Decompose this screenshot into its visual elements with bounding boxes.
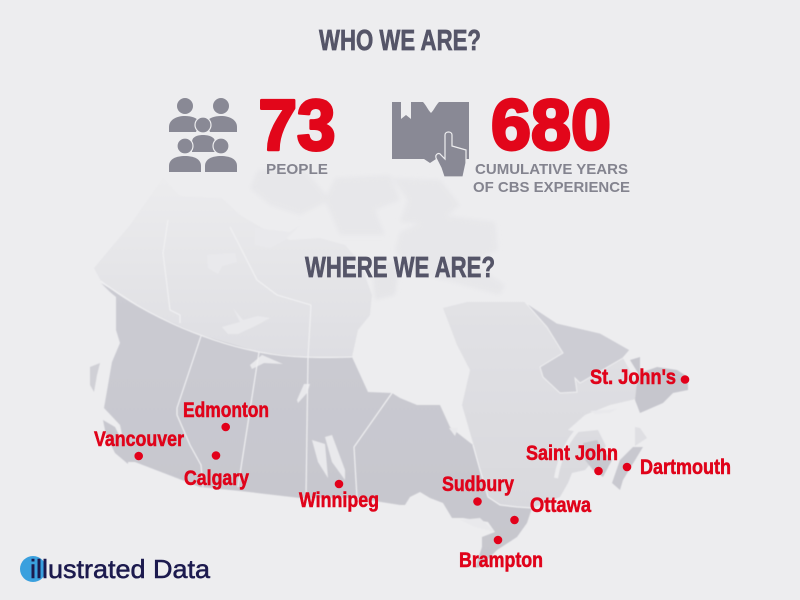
label: cumulative years of CBS experience: OF CBS EXPERIENCE (473, 179, 630, 196)
Nova Scotia (612, 447, 643, 490)
city: Saint John: Saint John (526, 442, 618, 465)
Labrador (525, 302, 630, 393)
city: Ottawa (510, 494, 591, 524)
provincial borders (101, 220, 532, 508)
Cape Breton (635, 427, 647, 446)
number: 680: 680 (491, 86, 611, 166)
title: who we are: WHO WE ARE? (319, 25, 481, 57)
Newfoundland (630, 357, 688, 413)
number: 73: 73 (258, 86, 336, 166)
icon: people (169, 98, 237, 172)
logo: illustrated Data: illustrated Data (30, 554, 211, 584)
Vancouver Island (103, 420, 128, 464)
estuary of the St. Lawrence (556, 406, 636, 478)
Haida Gwaii (90, 363, 100, 392)
lakes (207, 225, 617, 532)
city: Edmonton (183, 399, 269, 431)
city: Brampton: Brampton (459, 549, 543, 572)
label: cumulative years of CBS experience (473, 161, 630, 196)
city: Winnipeg: Winnipeg (299, 489, 379, 512)
New Brunswick (583, 440, 612, 477)
map of Canada (90, 170, 688, 568)
city: Sudbury (442, 473, 514, 506)
city: Dartmouth: Dartmouth (640, 456, 731, 479)
city: Sudbury: Sudbury (442, 473, 514, 496)
city: Brampton (459, 536, 543, 572)
icon: book and hand (392, 102, 469, 177)
title: where we are: WHERE WE ARE? (305, 252, 495, 284)
city: Saint John (526, 442, 618, 475)
label: cumulative years of CBS experience: CUMULATIVE YEARS (475, 161, 628, 178)
city: St. John's: St. John's (590, 366, 676, 389)
city: Vancouver: Vancouver (94, 428, 184, 451)
city: Edmonton: Edmonton (183, 399, 269, 422)
Quebec (443, 302, 640, 508)
label: people: PEOPLE (266, 161, 328, 178)
city: Vancouver (94, 428, 184, 460)
city: Ottawa: Ottawa (530, 494, 591, 517)
northern territories (94, 170, 505, 357)
city: Calgary: Calgary (184, 467, 249, 490)
western and central provinces (101, 283, 532, 568)
city: Calgary (184, 451, 249, 490)
city: Winnipeg (299, 480, 379, 512)
